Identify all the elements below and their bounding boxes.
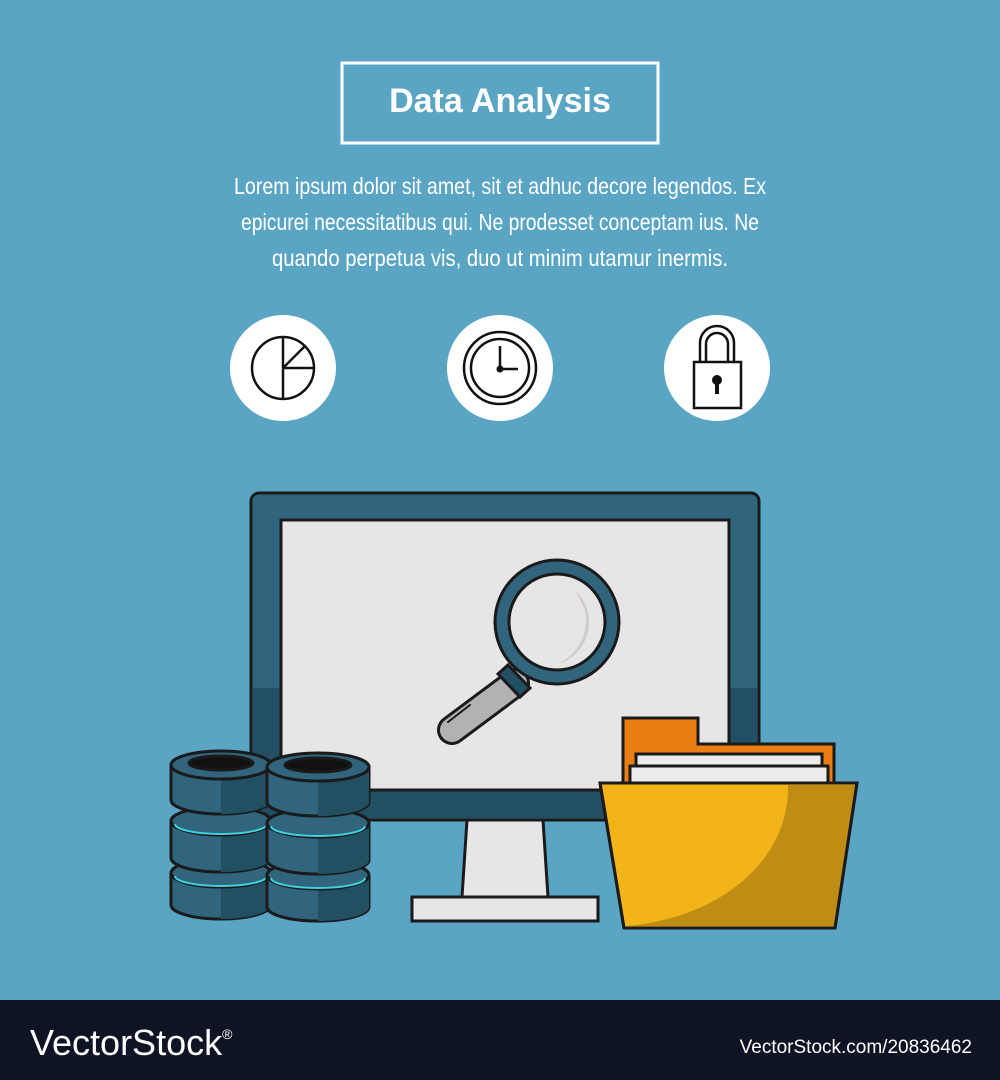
text block: description: Lorem ipsum dolor sit amet, sit et adhuc decore legendos. Ex — [234, 173, 766, 199]
icon: magnifying glass — [448, 560, 619, 730]
text block: description: epicurei necessitatibus qui. Ne prodesset conceptam ius. Ne — [241, 209, 759, 235]
title: Data Analysis — [389, 82, 611, 120]
footer bar: VectorStock.com/20836462 — [740, 1037, 972, 1058]
icon: padlock — [664, 315, 770, 421]
monitor stand — [462, 820, 548, 897]
database stacks — [171, 751, 369, 921]
footer bar — [0, 1000, 1000, 1080]
footer bar: VectorStock — [30, 1022, 222, 1063]
icon: pie chart — [230, 315, 336, 421]
text block: description — [234, 173, 766, 271]
folder — [600, 718, 857, 928]
monitor — [251, 493, 759, 921]
icon: clock — [447, 315, 553, 421]
footer bar: ® — [222, 1026, 233, 1042]
title — [342, 63, 658, 143]
text block: description: quando perpetua vis, duo ut minim utamur inermis. — [272, 245, 728, 271]
